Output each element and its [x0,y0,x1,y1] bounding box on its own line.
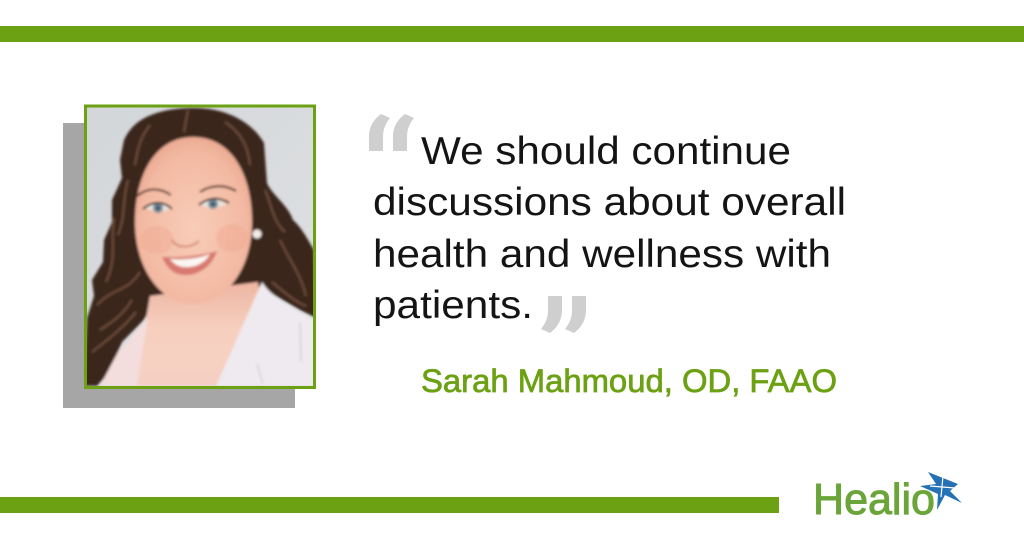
top green bar [0,26,1024,42]
eyes [145,204,171,211]
quote text: discussions about overall [373,181,846,224]
quote text: patients. [373,284,533,327]
attribution: Sarah Mahmoud, OD, FAAO [421,363,837,399]
closing quotation mark [541,296,586,333]
quote text [373,130,846,327]
nose [172,240,199,247]
blouse left [100,318,148,386]
portrait with offset shadow [63,105,316,408]
quote text: health and wellness with [373,233,831,276]
mouth [162,251,217,275]
opening quotation mark [369,114,414,151]
portrait illustration [84,107,316,386]
hair [84,108,316,386]
chest [135,282,262,386]
photo frame [84,105,316,389]
Healio logo [813,472,962,524]
photo shadow panel [63,123,295,408]
logo wordmark: Healio [813,475,935,524]
earring [252,230,262,238]
jacket right [216,282,314,386]
logo star [920,472,962,510]
hair highlights [92,110,306,352]
eyebrows [137,186,236,196]
quote text: We should continue [421,130,791,173]
face [135,137,252,304]
photo border [86,106,314,388]
cheeks [142,227,174,253]
bottom green bar [0,497,779,513]
